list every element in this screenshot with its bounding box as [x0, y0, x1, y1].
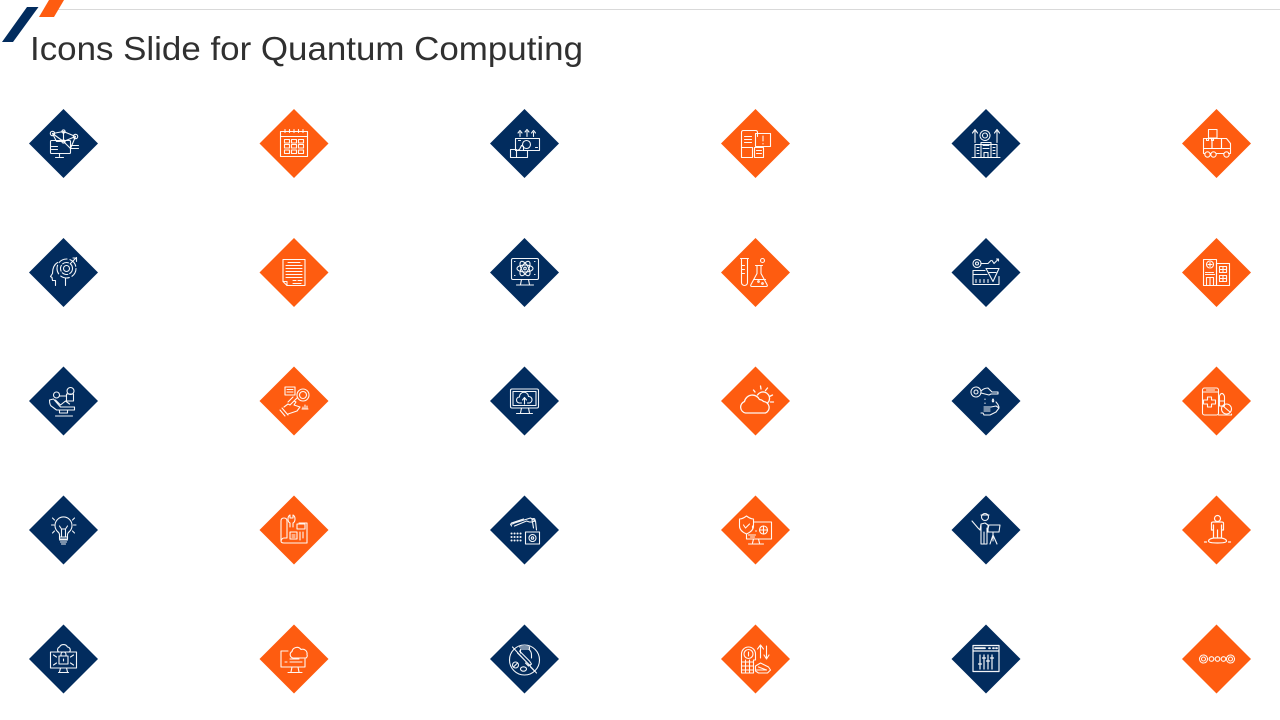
- icon: hospital building: [1182, 238, 1251, 307]
- icon: no drugs sign: [490, 624, 559, 694]
- icon: patient in medical chair: [29, 366, 98, 436]
- icon: gear and hands with drop: [952, 366, 1020, 436]
- icon: monitor with cloud and lock: [29, 624, 98, 694]
- icon: monitor with cloud upload: [490, 366, 559, 436]
- title: Icons Slide for Quantum Computing: [30, 31, 583, 68]
- icon: coins with arrows: [721, 624, 790, 694]
- icon: monitor with cloud: [260, 624, 328, 694]
- logo mark: [2, 0, 64, 42]
- icon: medical phone with capsule and pill: [1182, 366, 1251, 436]
- icon: network over monitor: [29, 109, 98, 178]
- icon: light bulb: [29, 496, 98, 564]
- icon: documents with alert: [721, 109, 790, 178]
- header rule: [57, 9, 1280, 10]
- icon: test tube and flask: [721, 238, 790, 307]
- icon: banknote with thumbs up and arrows: [490, 109, 559, 178]
- icon: presenter with lectern: [952, 496, 1020, 564]
- icon: calendar: [260, 109, 328, 178]
- icon: document: [260, 238, 328, 307]
- icon: factory with gear and arrows: [952, 109, 1020, 178]
- icon: person on pedestal: [1182, 496, 1251, 564]
- icon: robot arm with gear box: [490, 496, 559, 564]
- icon: head with gear and growth arrow: [29, 238, 98, 307]
- icon: cloud and sun: [721, 366, 790, 436]
- icon: shield and monitor with globe: [721, 496, 790, 564]
- icon: gear, funnel and browser: [952, 238, 1020, 307]
- icon: hand touching magnifier: [260, 366, 328, 436]
- icon: browser with sliders: [952, 624, 1020, 694]
- icon: blueprint and wrench: [260, 496, 328, 564]
- icon: chain of nodes: [1182, 624, 1251, 694]
- icon: delivery truck with boxes: [1182, 109, 1251, 178]
- icon: monitor with atom: [490, 238, 559, 307]
